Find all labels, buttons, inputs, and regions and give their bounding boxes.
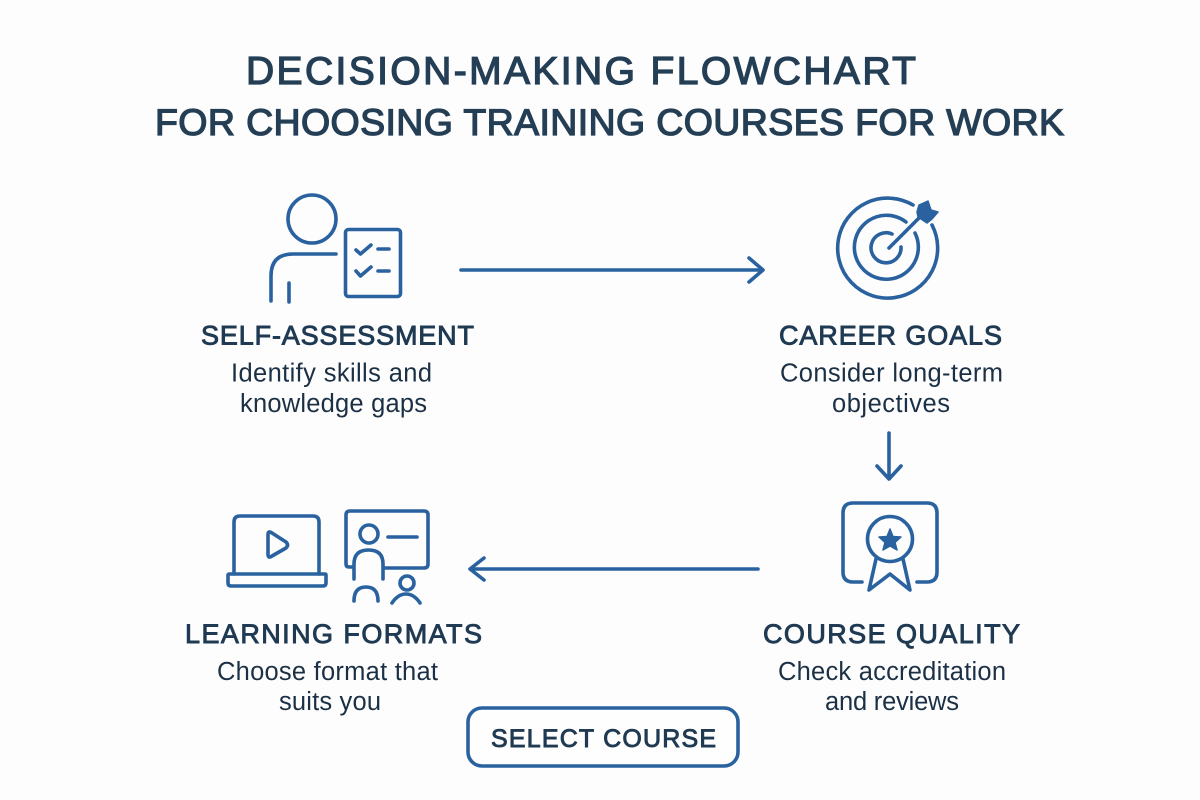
description: career goals: objectives (832, 390, 950, 418)
icon: laptop and classroom (228, 511, 428, 603)
step: course quality (763, 503, 1020, 716)
description: self-assessment: knowledge gaps (240, 390, 427, 418)
button: select course: SELECT COURSE (491, 725, 716, 753)
button: select course (468, 708, 738, 766)
arrow: career goals to course quality (877, 433, 901, 479)
description: course quality: Check accreditation (778, 658, 1006, 686)
description: learning formats: suits you (279, 688, 381, 716)
arrow: course quality to learning formats (470, 558, 758, 580)
description: career goals: Consider long-term (780, 360, 1003, 388)
heading: career goals: CAREER GOALS (779, 320, 1002, 350)
description: career goals (780, 360, 1003, 418)
description: learning formats (217, 658, 438, 716)
heading: learning formats: LEARNING FORMATS (185, 619, 482, 649)
description: course quality: and reviews (825, 688, 959, 716)
heading: self-assessment: SELF-ASSESSMENT (201, 320, 474, 350)
step: career goals (779, 198, 1003, 418)
title (155, 50, 1064, 143)
title: DECISION-MAKING FLOWCHART (246, 50, 916, 93)
description: self-assessment (231, 360, 432, 418)
description: self-assessment: Identify skills and (231, 360, 432, 388)
title: FOR CHOOSING TRAINING COURSES FOR WORK (155, 101, 1064, 143)
description: course quality (778, 658, 1006, 716)
step: self-assessment (201, 195, 474, 418)
icon: certificate with medal (843, 503, 937, 590)
description: learning formats: Choose format that (217, 658, 438, 686)
step: learning formats (185, 511, 482, 716)
heading: course quality: COURSE QUALITY (763, 619, 1020, 649)
arrow: self-assessment to career goals (461, 258, 763, 282)
icon: target with arrow (838, 198, 938, 298)
icon: person with checklist (271, 195, 400, 302)
